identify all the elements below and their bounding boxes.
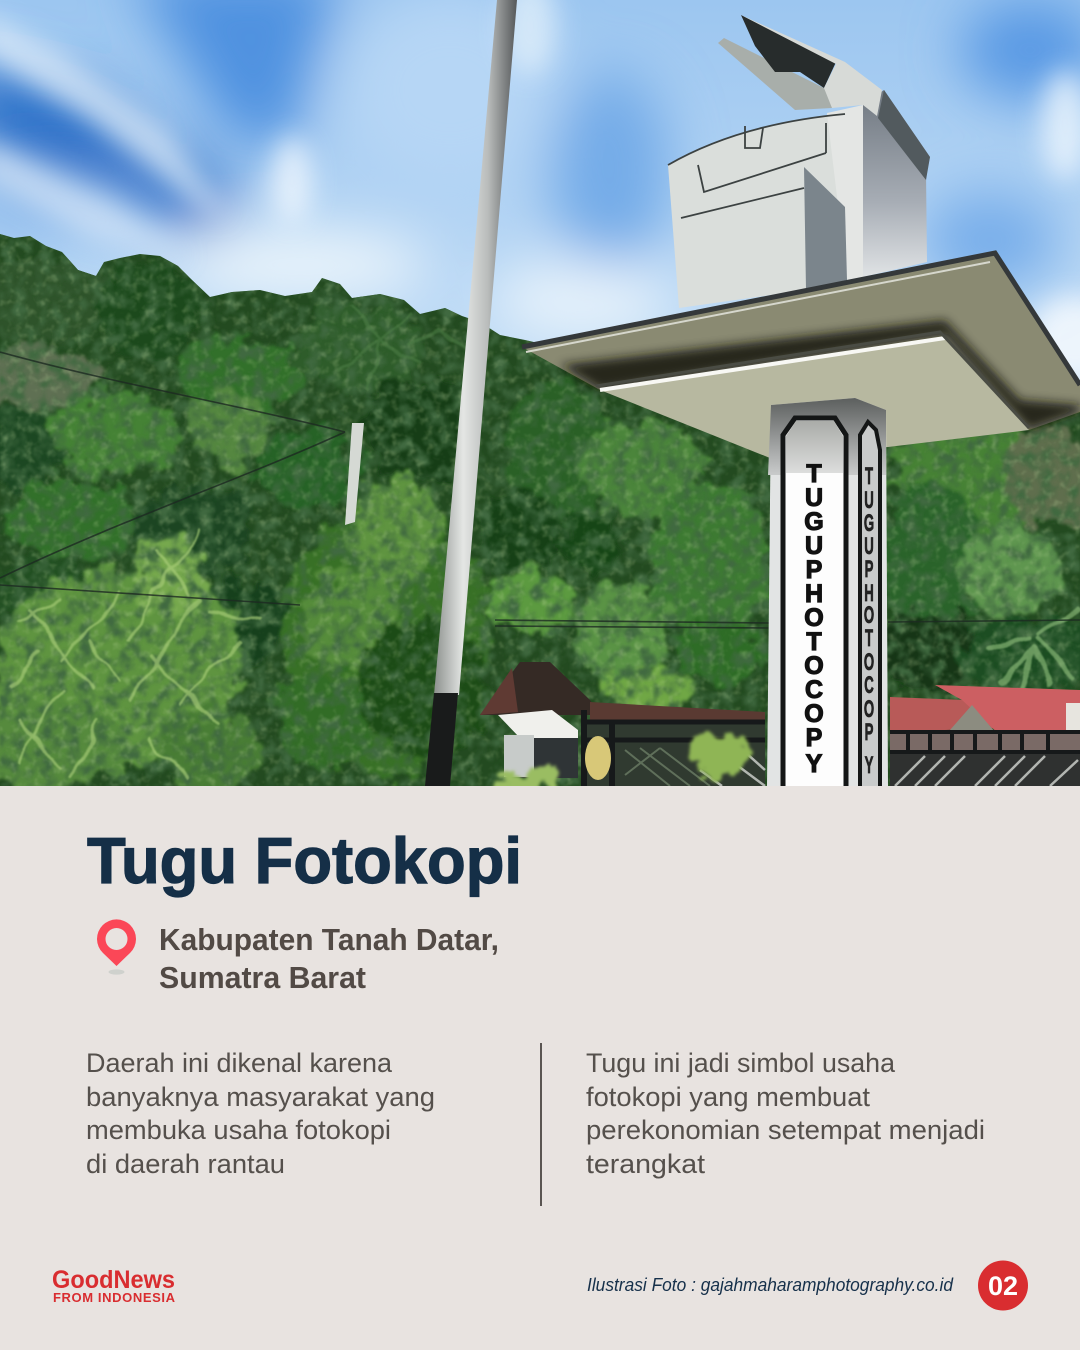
bamboo leaf strokes [10, 530, 260, 780]
iron fence [584, 710, 1080, 786]
text block: right description [586, 1048, 985, 1179]
pillar lettering side: TUGUPHOTOCOPY [864, 463, 874, 779]
text block: left description: di daerah rantau [86, 1149, 285, 1179]
monument canopy [522, 253, 1080, 458]
sculpture right side [863, 90, 930, 277]
logo: GoodNews from Indonesia [52, 1266, 176, 1305]
location text [159, 922, 499, 995]
pillar side panel [860, 422, 880, 786]
sculpture line details [668, 114, 845, 218]
round bush [272, 478, 490, 775]
panel: photo of monument [0, 0, 1080, 792]
logo: GoodNews from Indonesia: FROM INDONESIA [53, 1290, 176, 1305]
flag pole [425, 0, 517, 786]
text block: right description: perekonomian setempat menjadi [586, 1115, 985, 1145]
hillside foliage [0, 220, 1080, 790]
palm fronds [340, 310, 1080, 690]
foreground bamboo foliage [0, 535, 260, 790]
pillar lettering front: TUGUPHOTOCOPY [804, 460, 824, 778]
utility wires [0, 352, 1080, 628]
page number badge: 02 [988, 1271, 1018, 1301]
logo: GoodNews from Indonesia: GoodNews [52, 1266, 175, 1294]
text block: left description: Daerah ini dikenal karena [86, 1048, 393, 1078]
sculpture front body [668, 113, 847, 308]
text block: left description: banyaknya masyarakat yang [86, 1082, 435, 1112]
panel: caption background [0, 786, 1080, 1350]
column divider [540, 1043, 542, 1206]
page number badge [978, 1260, 1028, 1310]
small shrubs [503, 731, 746, 792]
copier lid [718, 38, 836, 110]
text block: left description [86, 1048, 435, 1179]
text block: left description: membuka usaha fotokopi [86, 1115, 391, 1145]
text block: right description: terangkat [586, 1149, 706, 1179]
title: Tugu Fotokopi [87, 824, 522, 897]
location text: Sumatra Barat [159, 960, 366, 995]
dark roof and buildings [480, 662, 1080, 763]
white box structure [498, 710, 578, 778]
photo credit: Ilustrasi Foto : gajahmaharamphotography.co.id [587, 1275, 954, 1295]
text block: right description: fotokopi yang membuat [586, 1082, 870, 1112]
text block: right description: Tugu ini jadi simbol usaha [586, 1048, 896, 1078]
round yellow sign [585, 736, 611, 780]
icon: location pin [97, 919, 136, 975]
monument pillar [767, 398, 888, 786]
sculpture right column [827, 105, 863, 280]
monument: photocopier sculpture [668, 15, 930, 308]
sculpture inner shadow block [804, 167, 847, 290]
pillar front panel [783, 418, 846, 786]
sky with clouds [0, 0, 1080, 380]
location text: Kabupaten Tanah Datar, [159, 922, 499, 957]
small utility pole [345, 423, 364, 525]
